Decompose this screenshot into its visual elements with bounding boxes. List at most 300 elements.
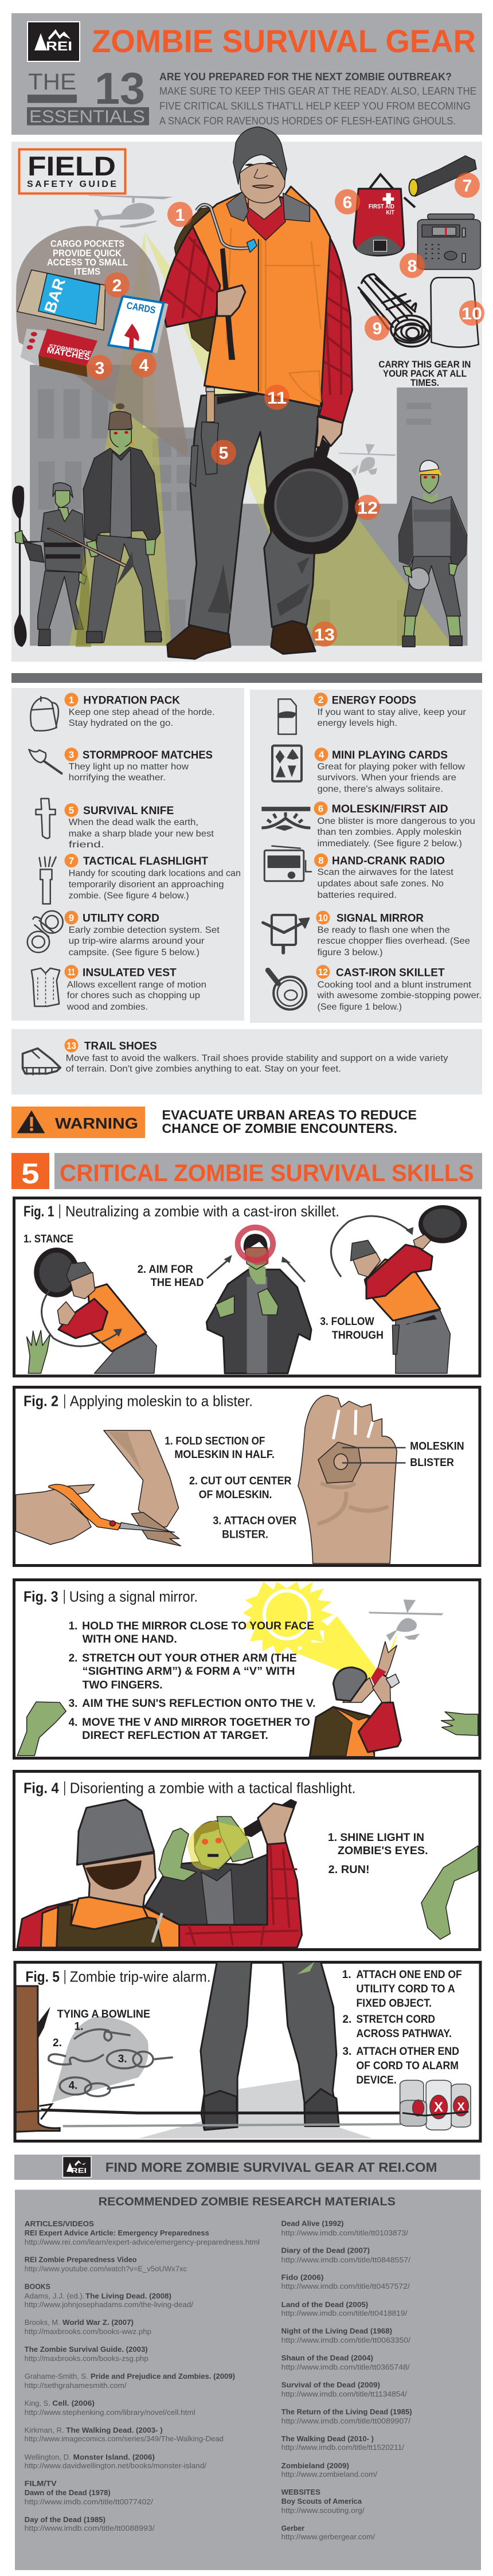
fig 3 text: 2.: [69, 1652, 77, 1664]
text: product labels: MATCHES: [46, 345, 91, 362]
fig 5 text: [25, 1968, 462, 2092]
gear: flashlight: [409, 156, 476, 197]
man: hand and hose: [220, 248, 235, 360]
icon: cards: [272, 746, 302, 781]
illustration: moleskin: [15, 1396, 406, 1563]
scissors: [49, 1484, 174, 1532]
fig 2 text: BLISTER: [410, 1457, 454, 1469]
banner: find more: [14, 2155, 480, 2180]
item 4 mini playing cards: Great for playing poker with fellow: [318, 762, 465, 772]
item 7 tactical flashlight: 7: [69, 855, 74, 866]
item 6 moleskin first aid: than ten zombies. Apply moleskin: [318, 827, 461, 837]
item 8 hand-crank radio: HAND-CRANK RADIO: [332, 855, 445, 867]
list: articles books film: http://www.imdb.com/title/tt0088993/: [25, 2524, 155, 2532]
number markers: 6: [343, 193, 352, 212]
item 7 tactical flashlight: zombie. (See figure 4 below.): [69, 891, 189, 901]
list: articles books film: http://www.stephenking.com/library/novel/cell.html: [25, 2408, 195, 2417]
item 11 insulated vest: wood and zombies.: [66, 1002, 148, 1012]
intro text: A SNACK FOR RAVENOUS HORDES OF FLESH-EATING GHOULS.: [159, 115, 456, 127]
buildings: [30, 365, 468, 646]
item 9 utility cord: 9: [69, 913, 74, 923]
number markers: 9: [373, 319, 382, 338]
fig 4 text: ZOMBIE'S EYES.: [338, 1845, 428, 1857]
item 12 cast-iron skillet: 12: [318, 967, 328, 978]
list: films and websites: Diary of the Dead (2007): [281, 2246, 370, 2255]
man: right sleeve: [311, 236, 352, 423]
item 4 mini playing cards: [315, 748, 465, 794]
man: boots: [167, 621, 315, 659]
moleskin pieces: [131, 1512, 181, 1546]
panel: research materials: [15, 2190, 481, 2570]
list: articles books film: http://www.imdb.com/title/tt0077402/: [25, 2497, 153, 2506]
text: carry caption: YOUR PACK AT ALL: [383, 368, 467, 379]
text: bubble caption: ACCESS TO SMALL: [47, 257, 128, 268]
fig 3 text: WITH ONE HAND.: [83, 1633, 177, 1645]
fig 3 text: STRETCH OUT YOUR OTHER ARM (THE: [82, 1652, 297, 1664]
item 1 hydration pack: [64, 693, 215, 728]
scissor hand: [15, 1484, 95, 1545]
can labels: [434, 2100, 465, 2115]
fig 1 text: [24, 1202, 384, 1342]
text: product labels: BAR: [41, 276, 69, 315]
list: articles books film: http://www.imagecomics.com/series/349/The-Walking-Dead: [25, 2434, 224, 2443]
item 7 tactical flashlight: temporarily disorient an approaching: [69, 879, 224, 890]
illustration: city scene and gear: [12, 127, 480, 659]
zombie: kayak paddle: [12, 483, 87, 647]
list: articles books film: http://www.davidwellington.net/books/monster-island/: [25, 2461, 206, 2470]
item 11 insulated vest: INSULATED VEST: [83, 967, 177, 979]
item 1 hydration pack: 1: [69, 695, 74, 705]
tree: [15, 1986, 60, 2132]
list: articles books film: FILM/TV: [25, 2479, 57, 2488]
list: films and websites: http://www.imdb.com/title/tt1520211/: [281, 2443, 404, 2452]
figure 2: [14, 1387, 480, 1565]
list: films and websites: http://www.imdb.com/title/tt0103873/: [281, 2229, 408, 2237]
list: films and websites: http://www.imdb.com/title/tt0063350/: [281, 2336, 410, 2344]
fig 4 text: Fig. 4: [24, 1780, 59, 1797]
list: articles books film: ARTICLES/VIDEOS: [25, 2219, 94, 2228]
item 9 utility cord: UTILITY CORD: [83, 913, 159, 925]
panel: gear list left: [11, 688, 244, 1021]
text: product labels: [41, 203, 394, 362]
fig 2 text: 1. FOLD SECTION OF: [165, 1435, 265, 1447]
item 3 stormproof matches: STORMPROOF MATCHES: [83, 749, 213, 761]
list: films and websites: http://www.imdb.com/title/tt1134854/: [281, 2390, 407, 2398]
item 6 moleskin first aid: [314, 802, 475, 849]
fig 2 text: BLISTER.: [222, 1529, 268, 1541]
fig 5 text: DEVICE.: [357, 2074, 397, 2086]
panel: trail shoes: of terrain. Don't give zombies anything to eat. Stay on your feet.: [66, 1064, 341, 1074]
fig 2 text: MOLESKIN: [410, 1441, 464, 1453]
number markers: [87, 173, 484, 647]
list: films and websites: http://www.scouting.org/: [281, 2506, 365, 2515]
list: articles books film: REI Zombie Preparedness Video: [25, 2256, 137, 2264]
list: articles books film: http://maxbrooks.com/books-zsg.php: [25, 2354, 148, 2363]
panel: gear list right: [250, 690, 482, 1023]
number markers: 11: [267, 389, 287, 408]
intro text: FIVE CRITICAL SKILLS THAT'LL HELP KEEP YOU FROM BECOMING: [159, 100, 471, 112]
gear: signal mirror: [431, 277, 479, 347]
banner: find more: FIND MORE ZOMBIE SURVIVAL GEAR AT REI.COM: [105, 2160, 437, 2175]
heading: 5 critical skills: 5: [21, 1158, 40, 1190]
list: films and websites: Shaun of the Dead (2004): [281, 2354, 373, 2362]
item 10 signal mirror: figure 3 below.): [318, 948, 383, 957]
helicopter small: [338, 444, 396, 476]
fig 5 text: STRETCH CORD: [357, 2014, 435, 2026]
text: bubble caption: PROVIDE QUICK: [53, 248, 122, 259]
icon: flashlight: [40, 857, 56, 904]
item 9 utility cord: [64, 910, 220, 957]
logo: REI: REI: [46, 39, 72, 53]
list: films and websites: Night of the Living Dead (1968): [281, 2327, 392, 2335]
list: films and websites: Boy Scouts of America: [281, 2497, 362, 2505]
fig 2 text: [24, 1393, 464, 1541]
cord: [41, 2110, 401, 2113]
list: films and websites: Gerber: [281, 2524, 304, 2532]
number markers: 8: [408, 257, 417, 276]
list: articles books film: Dawn of the Dead (1978): [25, 2488, 111, 2497]
man: backpack: [174, 206, 234, 351]
man back: [17, 1843, 302, 1948]
number markers: 4: [139, 356, 149, 375]
fig 2 text: MOLESKIN IN HALF.: [174, 1449, 275, 1461]
item 8 hand-crank radio: Scan the airwaves for the latest: [318, 867, 454, 877]
fig 4 text: Disorienting a zombie with a tactical flashlight.: [70, 1780, 355, 1797]
item 10 signal mirror: 10: [318, 913, 328, 923]
warning: EVACUATE URBAN AREAS TO REDUCE: [162, 1108, 417, 1123]
fig 1 text: THE HEAD: [151, 1277, 204, 1289]
can labels: X: [434, 2100, 443, 2115]
item 3 stormproof matches: horrifying the weather.: [69, 773, 166, 783]
item 11 insulated vest: 11: [68, 967, 75, 978]
man: shirt and collar: [244, 197, 285, 240]
helicopter large: [88, 195, 173, 228]
panel: trail shoes: Move fast to avoid the walkers. Trail shoes provide stability and support on a wide variety: [66, 1054, 448, 1063]
fig 5 text: 1.: [342, 1969, 351, 1981]
item 6 moleskin first aid: MOLESKIN/FIRST AID: [332, 803, 448, 815]
number markers: 10: [461, 304, 482, 323]
item 2 energy foods: If you want to stay alive, keep your: [318, 707, 467, 717]
fig 2 text: 3. ATTACH OVER: [213, 1515, 297, 1527]
reflection beam: [296, 1616, 377, 1682]
illustration: flashlight: [17, 1799, 478, 1948]
gear: playing cards: [108, 296, 168, 353]
list: articles books film: The Zombie Survival Guide. (2003): [25, 2345, 148, 2354]
figure 4: [14, 1772, 480, 1949]
zombie arm right: [421, 1846, 478, 1940]
fig 1 text: 2. AIM FOR: [138, 1264, 193, 1276]
heading: field safety guide: [19, 149, 125, 194]
item 2 energy foods: 2: [318, 694, 323, 705]
logo: REI small: [63, 2157, 91, 2178]
heading: the 13 essentials: ESSENTIALS: [29, 107, 145, 126]
foot: [298, 1396, 397, 1563]
spotlight beams: [69, 232, 453, 646]
list: articles books film: REI Expert Advice Article: Emergency Preparedness: [25, 2229, 209, 2237]
fig 5 text: Zombie trip-wire alarm.: [70, 1968, 211, 1985]
list: articles books film: [25, 2219, 260, 2532]
item 12 cast-iron skillet: with awesome zombie-stopping power.: [316, 991, 482, 1000]
item 8 hand-crank radio: [314, 853, 454, 900]
figure 5: [15, 1962, 480, 2141]
item 12 cast-iron skillet: CAST-IRON SKILLET: [336, 967, 445, 979]
list: articles books film: The Living Dead. (2008): [85, 2292, 171, 2300]
icon: skillet: [268, 970, 306, 1010]
text: product labels: CARDS: [126, 300, 156, 316]
item 10 signal mirror: rescue chopper flies overhead. (See: [318, 936, 470, 946]
intro text: MAKE SURE TO KEEP THIS GEAR AT THE READY. ALSO, LEARN THE: [159, 85, 476, 97]
list: articles books film: King, S.: [25, 2399, 50, 2407]
item 11 insulated vest: [64, 965, 206, 1012]
list: films and websites: [281, 2219, 412, 2541]
zombie hand right: [441, 1712, 478, 1735]
legs: [201, 1962, 339, 2130]
item 4 mini playing cards: 4: [319, 749, 324, 760]
fig 3 text: AIM THE SUN'S REFLECTION ONTO THE V.: [82, 1698, 316, 1710]
list: articles books film: http://www.youtube.com/watch?v=E_v5oUWx7xc: [25, 2265, 187, 2273]
number markers: 2: [112, 276, 122, 295]
list: films and websites: http://www.imdb.com/title/tt0418819/: [281, 2309, 408, 2317]
list: films and websites: http://www.imdb.com/title/tt0457572/: [281, 2282, 410, 2290]
item 4 mini playing cards: MINI PLAYING CARDS: [332, 749, 448, 761]
warning: [11, 1107, 417, 1138]
item 6 moleskin first aid: immediately. (See figure 2 below.): [318, 839, 462, 849]
fig 2 text: Fig. 2: [24, 1393, 58, 1410]
figure 3: [14, 1580, 480, 1758]
item 10 signal mirror: Be ready to flash one when the: [318, 925, 450, 935]
gear: matches: [21, 329, 97, 377]
list: articles books film: http://www.rei.com/learn/expert-advice/emergency-preparedness.html: [25, 2238, 260, 2246]
flashlight hand: [244, 1799, 297, 1837]
fig 3 text: HOLD THE MIRROR CLOSE TO YOUR FACE: [82, 1620, 314, 1632]
warning: CHANCE OF ZOMBIE ENCOUNTERS.: [162, 1121, 397, 1136]
logo: REI: [28, 22, 80, 61]
icon: match: [29, 749, 62, 773]
can labels: X: [457, 2101, 465, 2113]
panel: trail shoes: TRAIL SHOES: [84, 1041, 157, 1053]
item 5 survival knife: When the dead walk the earth,: [69, 818, 198, 827]
fig 2 text: Applying moleskin to a blister.: [70, 1393, 253, 1410]
heading: the 13 essentials: [27, 63, 149, 126]
step 1 figure: [34, 1248, 156, 1373]
step 3 figure: [331, 1205, 467, 1373]
item 12 cast-iron skillet: (See figure 1 below.): [318, 1002, 402, 1012]
fig 4 text: [24, 1780, 428, 1876]
list: films and websites: http://www.zombieland.com/: [281, 2470, 377, 2479]
icons left column: [28, 697, 63, 1006]
number markers: 7: [463, 177, 472, 196]
item 6 moleskin first aid: 6: [318, 803, 323, 814]
list: films and websites: Survival of the Dead (2009): [281, 2380, 380, 2389]
item 12 cast-iron skillet: Cooking tool and a blunt instrument: [318, 980, 472, 990]
fig 5 text: OF CORD TO ALARM: [357, 2060, 459, 2072]
cargo bubble: [16, 226, 188, 455]
gear: radio: [417, 214, 480, 269]
list: articles books film: http://maxbrooks.com/books-wwz.php: [25, 2327, 151, 2336]
man: knife: [201, 387, 218, 475]
list: articles books film: BOOKS: [25, 2282, 50, 2291]
fig 5 text: 1.: [75, 2021, 83, 2033]
icon: mirror: [263, 915, 309, 953]
man: skillet: [264, 436, 359, 554]
fig 3 text: [24, 1588, 316, 1742]
item 9 utility cord: up trip-wire alarms around your: [69, 936, 205, 946]
man: head: [248, 193, 281, 220]
list: films and websites: Land of the Dead (2005): [281, 2300, 368, 2309]
list: articles books film: Pride and Prejudice and Zombies. (2009): [91, 2372, 235, 2380]
fig 1 text: THROUGH: [332, 1330, 384, 1342]
list: articles books film: Day of the Dead (1985): [25, 2515, 105, 2524]
number markers: 13: [314, 626, 335, 644]
zombie: right cap: [398, 460, 467, 647]
item 3 stormproof matches: [64, 748, 213, 783]
item 3 stormproof matches: 3: [69, 749, 74, 760]
icon: backpack: [30, 697, 58, 731]
item 10 signal mirror: [316, 910, 470, 957]
fig 5 text: ATTACH OTHER END: [357, 2046, 459, 2058]
number markers: 3: [95, 359, 104, 378]
figure 1: [14, 1198, 480, 1376]
zombie hand: [27, 1330, 50, 1373]
fig 2 text: OF MOLESKIN.: [199, 1489, 272, 1501]
list: films and websites: Zombieland (2009): [281, 2461, 349, 2470]
helicopter: [369, 1600, 443, 1641]
heading: the 13 essentials: THE: [28, 69, 76, 95]
fig 1 text: 3. FOLLOW: [320, 1316, 374, 1328]
item 5 survival knife: friend.: [69, 840, 104, 850]
panel: trail shoes: [11, 1029, 482, 1094]
gear: energy bar: [17, 270, 105, 330]
text: product labels: KIT: [386, 209, 394, 216]
item 2 energy foods: energy levels high.: [318, 718, 397, 728]
fig 5 text: 2.: [53, 2037, 62, 2049]
moleskin patch: [318, 1442, 361, 1483]
list: films and websites: The Walking Dead (2010- ): [281, 2434, 374, 2443]
text: bubble caption: [47, 239, 128, 277]
warning: WARNING: [55, 1115, 138, 1132]
icon: rope: [28, 911, 63, 952]
fig 3 text: 3.: [69, 1698, 77, 1710]
list: articles books film: http://www.johnjosephadams.com/the-living-dead/: [25, 2300, 193, 2309]
icon: bar: [278, 699, 296, 734]
fig 5 text: 2.: [343, 2014, 351, 2026]
icon: shoe: [22, 1049, 60, 1074]
title: ZOMBIE SURVIVAL GEAR: [92, 23, 476, 59]
list: articles books film: http://sethgrahamesmith.com/: [25, 2381, 127, 2390]
fig 5 text: Fig. 5: [25, 1968, 60, 1985]
item 2 energy foods: [314, 693, 467, 728]
item 4 mini playing cards: gone, there's always solitaire.: [318, 784, 443, 794]
list: films and websites: The Return of the Living Dead (1985): [281, 2407, 412, 2416]
light glow: [187, 1821, 248, 1870]
fig 3 text: TWO FINGERS.: [83, 1679, 163, 1691]
list: films and websites: http://www.imdb.com/title/tt0848557/: [281, 2256, 410, 2264]
text: carry caption: CARRY THIS GEAR IN: [378, 359, 471, 370]
fig 1 text: 1. STANCE: [24, 1233, 73, 1245]
icon: radio: [264, 846, 311, 881]
panel: field safety guide scene: [11, 127, 484, 662]
heading: field safety guide: SAFETY GUIDE: [27, 179, 116, 189]
list: films and websites: http://www.imdb.com/title/tt0365748/: [281, 2363, 410, 2371]
item 8 hand-crank radio: updates about safe zones. No: [318, 879, 444, 889]
text: bubble caption: ITEMS: [74, 266, 100, 277]
list: articles books film: World War Z. (2007): [62, 2318, 134, 2327]
item 7 tactical flashlight: Handy for scouting dark locations and can: [69, 869, 241, 878]
list: films and websites: Dead Alive (1992): [281, 2219, 344, 2228]
divider strip: [11, 673, 482, 683]
sun: [242, 1582, 333, 1656]
fig 5 text: ACROSS PATHWAY.: [357, 2028, 452, 2040]
gear: first aid kit: [354, 174, 415, 256]
item 3 stormproof matches: They light up no matter how: [69, 762, 189, 772]
fig 3 text: DIRECT REFLECTION AT TARGET.: [82, 1730, 268, 1742]
hand with moleskin: [104, 1430, 179, 1527]
item 11 insulated vest: Allows excellent range of motion: [67, 980, 206, 990]
number markers: 5: [219, 444, 228, 463]
bowline bubble: [52, 2016, 148, 2102]
list: articles books film: The Walking Dead. (2003- ): [66, 2426, 163, 2434]
fig 5 text: 3.: [343, 2046, 351, 2058]
item 4 mini playing cards: survivors. When your friends are: [318, 773, 456, 783]
text: product labels: STORMPROOF: [49, 343, 92, 356]
item 9 utility cord: campsite. (See figure 5 below.): [69, 948, 199, 957]
fig 3 text: “SIGHTING ARM”) & FORM A “V” WITH: [83, 1666, 295, 1678]
heading: 5 critical skills: CRITICAL ZOMBIE SURVIVAL SKILLS: [60, 1159, 474, 1186]
list: articles books film: Grahame-Smith, S.: [25, 2372, 88, 2380]
item 5 survival knife: [64, 803, 214, 850]
fig 3 text: Fig. 3: [24, 1588, 58, 1605]
zombie fist: [17, 1702, 66, 1756]
item 10 signal mirror: SIGNAL MIRROR: [337, 913, 424, 925]
illustration: skillet steps: [27, 1205, 467, 1373]
illustration: trip wire: [15, 1962, 471, 2139]
icon: blister: [261, 807, 310, 831]
list: films and websites: http://www.gerbergear.com/: [281, 2532, 375, 2541]
fig 5 text: 3.: [118, 2053, 127, 2065]
panel: header: [11, 13, 482, 135]
number markers: 1: [175, 206, 185, 225]
item 11 insulated vest: for chores such as chopping up: [67, 991, 200, 1000]
icons right column: [261, 699, 311, 1010]
fig 5 text: UTILITY CORD TO A: [357, 1983, 455, 1995]
heading: field safety guide: FIELD: [28, 151, 116, 181]
item 8 hand-crank radio: batteries required.: [318, 890, 397, 900]
item 7 tactical flashlight: TACTICAL FLASHLIGHT: [83, 855, 208, 867]
fig 3 text: MOVE THE V AND MIRROR TOGETHER TO: [82, 1717, 310, 1729]
list: articles books film: Cell. (2006): [52, 2399, 95, 2407]
item 1 hydration pack: Keep one step ahead of the horde.: [69, 707, 215, 717]
man: left sleeve: [161, 224, 226, 327]
illustration: signal mirror: [17, 1582, 478, 1757]
fig 1 text: Neutralizing a zombie with a cast-iron skillet.: [65, 1202, 339, 1219]
icon: warning triangle: [17, 1111, 45, 1133]
item 1 hydration pack: Stay hydrated on the go.: [69, 718, 173, 728]
item 7 tactical flashlight: [64, 854, 241, 901]
text: carry caption: TIMES.: [410, 377, 439, 388]
cans: [400, 2080, 471, 2130]
knots: [49, 2029, 173, 2096]
list: articles books film: Adams, J.J. (ed.).: [25, 2292, 85, 2300]
list: films and websites: Fido (2006): [281, 2273, 323, 2282]
panel: trail shoes: 13: [66, 1040, 76, 1051]
list: articles books film: Monster Island. (2006): [73, 2453, 155, 2461]
man: vest: [193, 186, 330, 406]
fig 3 text: Using a signal mirror.: [69, 1588, 198, 1605]
number markers: 12: [357, 499, 378, 518]
list: articles books film: Kirkman, R.: [25, 2426, 64, 2434]
fig 5 text: 4.: [69, 2080, 77, 2092]
list: films and websites: WEBSITES: [281, 2488, 320, 2496]
